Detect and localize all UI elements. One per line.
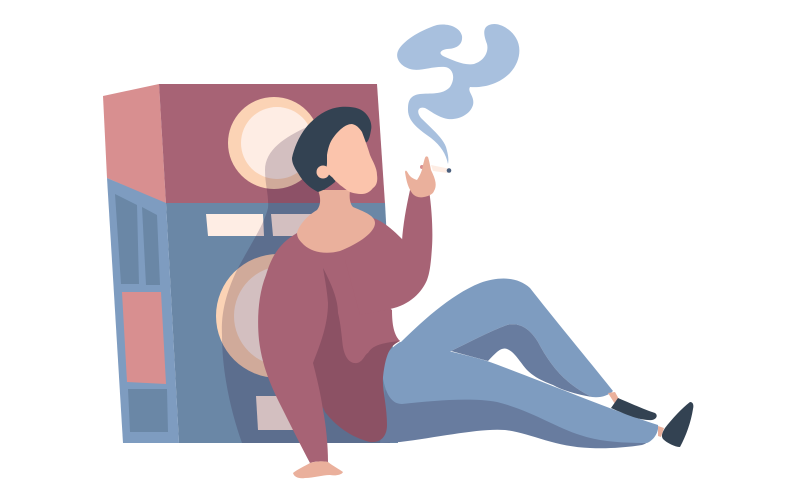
neck and chest: [297, 190, 375, 253]
upper dial: [228, 97, 320, 189]
label plate left: [206, 214, 264, 236]
bottom plate: [256, 396, 310, 430]
face: [316, 124, 377, 194]
side bottom panel: [128, 389, 168, 432]
hair: [292, 107, 371, 192]
front ankle: [658, 426, 664, 437]
machine: [103, 84, 398, 443]
side window left: [115, 194, 139, 284]
hand on floor: [293, 461, 343, 478]
machine lower front face: [166, 203, 398, 443]
lower leg shadow: [380, 390, 652, 448]
side pink panel: [122, 292, 166, 384]
smoke: [397, 24, 519, 164]
machine top front face: [159, 84, 385, 204]
cigarette: [420, 165, 451, 173]
raised leg: [395, 279, 613, 397]
label plate right: [271, 214, 320, 236]
back ankle: [608, 392, 620, 404]
person: [258, 107, 693, 478]
raised leg underside: [451, 324, 592, 397]
raised hand: [405, 156, 436, 197]
person's shadow on machine: [222, 127, 390, 443]
extended leg: [382, 342, 658, 443]
side window right: [142, 207, 160, 285]
front shoe: [662, 402, 693, 447]
back shoe: [611, 398, 657, 420]
torso and left arm: [258, 210, 403, 463]
torso dark underside: [305, 268, 400, 442]
machine top side face: [103, 84, 166, 204]
machine lower side face: [107, 178, 179, 443]
raised arm: [345, 190, 432, 315]
lower drum: [216, 254, 340, 378]
